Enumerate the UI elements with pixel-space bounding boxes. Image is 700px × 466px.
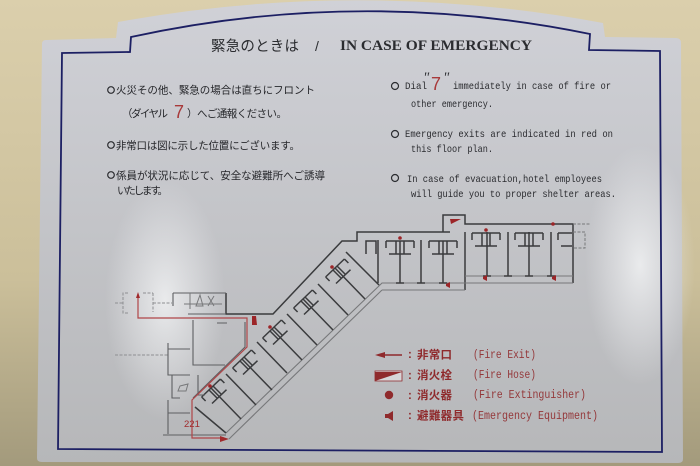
Japanese instructions: 火災その他、緊急の場合は直ちにフロント (116, 84, 315, 96)
legend: emergency equipment (385, 408, 598, 423)
English instructions: " (423, 70, 430, 86)
glare: right side reflection (585, 145, 695, 385)
Japanese instructions: （ダイヤル (122, 107, 168, 120)
room number: 221 (184, 419, 200, 430)
legend: fire exit: (Fire Exit) (473, 349, 536, 362)
west room details (178, 293, 222, 391)
title: IN CASE OF EMERGENCY (340, 38, 533, 54)
emergency equipment markers (446, 275, 556, 288)
title (211, 38, 533, 55)
west block walls (163, 293, 245, 435)
straight wing partitions (378, 232, 555, 283)
red evacuation route (138, 295, 247, 438)
fire hose markers (252, 219, 461, 325)
legend: fire exit: : (408, 349, 412, 361)
legend (375, 348, 598, 423)
English instructions: Dial (405, 81, 427, 93)
legend: fire extinguisher: (Fire Extinguisher) (473, 389, 586, 402)
legend: emergency equipment: : (408, 410, 412, 422)
title: 緊急のときは (211, 38, 299, 55)
legend: emergency equipment: 避難器具 (417, 408, 464, 422)
English instructions: In case of evacuation,hotel employees (407, 174, 602, 186)
Japanese instructions: 7 (174, 102, 184, 122)
Japanese instructions (108, 84, 326, 197)
corridor lower walls (226, 276, 573, 439)
faint west bracket (115, 293, 172, 355)
diagonal wing partitions (195, 252, 379, 433)
English instructions: will guide you to proper shelter areas. (411, 189, 616, 201)
English instructions: immediately in case of fire or (453, 81, 611, 93)
Japanese instructions: ）へご通報ください。 (187, 107, 287, 120)
English instructions: 7 (431, 74, 441, 94)
Japanese instructions: 係員が状況に応じて、安全な避難所へご誘導 (116, 169, 326, 182)
legend: fire extinguisher: : (408, 390, 412, 402)
floor plan (115, 215, 590, 442)
English instructions: this floor plan. (411, 144, 493, 156)
legend: fire exit: 非常口 (417, 348, 452, 362)
English instructions (392, 70, 616, 201)
legend: fire hose: : (408, 370, 412, 382)
legend: fire hose: (Fire Hose) (473, 369, 536, 382)
route arrowheads (136, 292, 229, 442)
Japanese instructions: 非常口は図に示した位置にございます。 (116, 139, 300, 152)
English instructions: " (443, 70, 450, 86)
legend: fire exit (375, 348, 536, 362)
English instructions: Emergency exits are indicated in red on (405, 129, 613, 141)
legend: emergency equipment: (Emergency Equipment) (472, 410, 598, 423)
extinguisher markers (208, 222, 555, 388)
straight wing room fixtures (366, 233, 572, 254)
legend: fire extinguisher (385, 388, 586, 402)
diagonal wing room fixtures (202, 259, 350, 404)
outer walls (226, 215, 573, 314)
Japanese instructions: いたします。 (117, 185, 168, 197)
title: / (315, 38, 319, 54)
faint east stair (573, 224, 590, 248)
English instructions: other emergency. (411, 99, 493, 111)
legend: fire hose (375, 368, 536, 382)
legend: fire hose: 消火栓 (417, 368, 452, 382)
legend: fire extinguisher: 消火器 (417, 388, 452, 402)
glare: lower left reflection (105, 180, 225, 420)
